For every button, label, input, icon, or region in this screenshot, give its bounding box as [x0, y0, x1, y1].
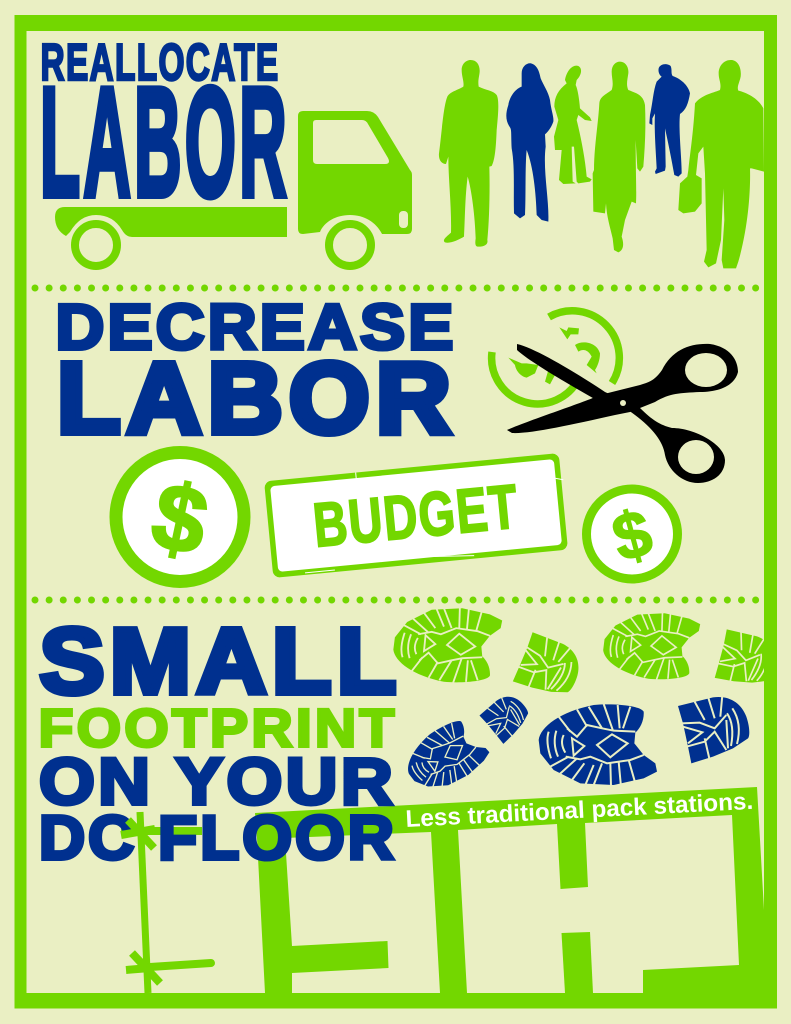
budget stamp: BUDGET — [310, 472, 522, 561]
heading: decrease labor: DECREASE — [56, 291, 456, 363]
footprint: green 1 — [393, 607, 502, 683]
footprints — [393, 607, 785, 801]
icon: scissors — [507, 344, 738, 483]
person 3 — [554, 66, 592, 184]
door markers — [121, 812, 211, 993]
budget stamp — [264, 453, 570, 578]
text: LABOR — [40, 56, 290, 228]
icon: large dollar coin — [116, 452, 244, 582]
person 5 — [649, 64, 690, 177]
truck — [55, 111, 412, 266]
person 4 — [593, 62, 645, 252]
heading: small footprint on your dc floor — [38, 609, 402, 873]
dotted dividers — [35, 288, 762, 600]
icon: small dollar coin — [586, 489, 678, 579]
footprint: blue half 2 — [476, 689, 536, 748]
floor plan — [121, 787, 764, 993]
footprint: blue 1 — [397, 712, 494, 801]
truck wheels — [75, 224, 371, 266]
heading: small footprint on your dc floor: DC FLOOR — [39, 803, 397, 873]
heading: small footprint on your dc floor: ON YOUR — [39, 745, 396, 818]
person 1 — [439, 60, 498, 247]
footprint: green half 4 — [705, 621, 785, 700]
caption: less traditional pack stations: Less traditional pack stations. — [405, 788, 754, 833]
person 2 — [506, 63, 553, 222]
footprint: blue 3 — [539, 704, 657, 787]
footprint: blue half 4 — [678, 695, 749, 763]
heading: decrease labor: LABOR — [57, 342, 457, 454]
icon: large dollar coin: $ — [143, 462, 216, 575]
icon: small dollar coin: $ — [605, 495, 659, 575]
heading: reallocate labor: REALLOCATE — [40, 33, 280, 91]
person 6 — [678, 60, 764, 268]
icon: cut coin — [492, 311, 619, 404]
truck cab — [298, 111, 412, 234]
truck headlight — [399, 211, 408, 228]
heading: small footprint on your dc floor: FOOTPRINT — [38, 698, 398, 758]
truck flatbed — [55, 207, 287, 237]
heading: reallocate labor — [40, 33, 290, 228]
footprint: green 3 — [603, 612, 700, 680]
heading: decrease labor — [56, 291, 457, 454]
heading: small footprint on your dc floor: SMALL — [40, 609, 402, 713]
people silhouettes — [439, 60, 764, 268]
footprint: green half 2 — [503, 624, 591, 711]
